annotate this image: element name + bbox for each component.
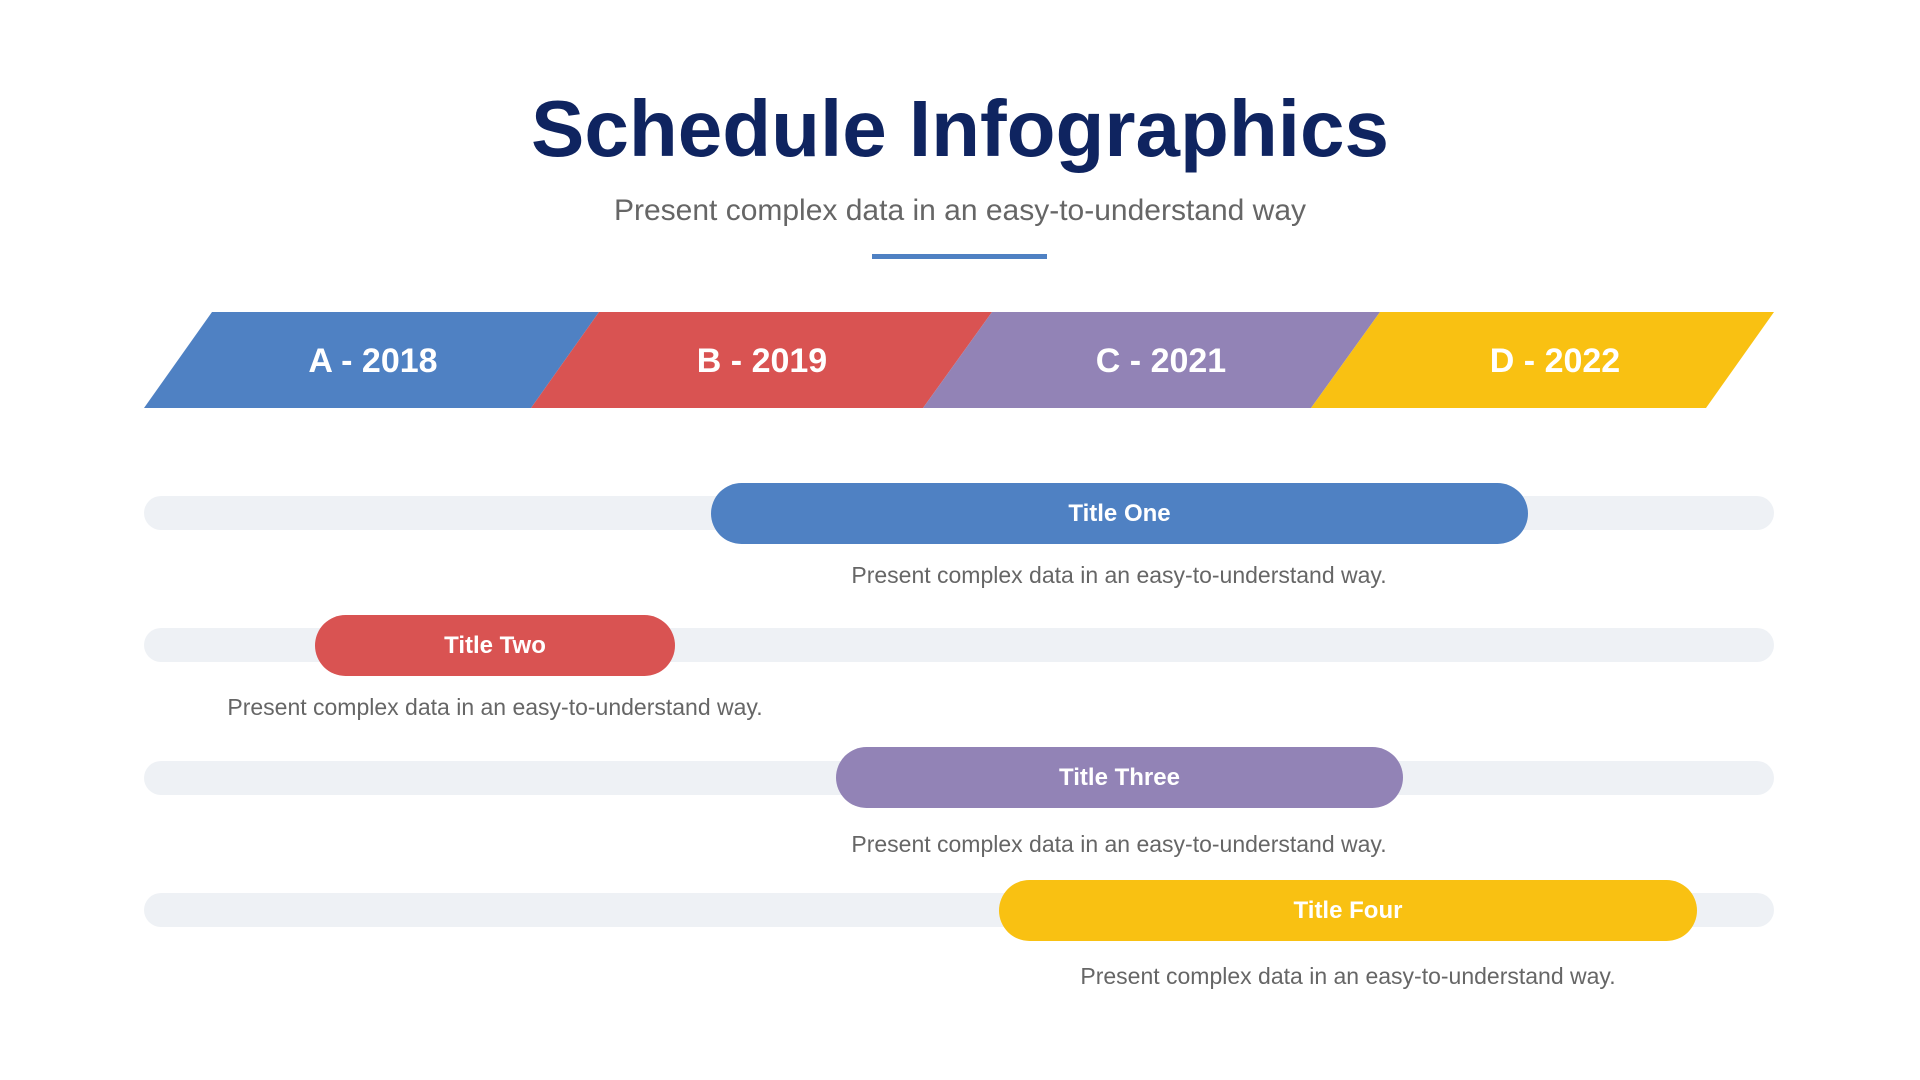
row 3 description: Present complex data in an easy-to-understand way. xyxy=(851,831,1387,857)
row 3 pill: Title Three xyxy=(1059,764,1180,790)
row 3 pill xyxy=(836,747,1403,808)
segment B: B - 2019 xyxy=(697,342,827,380)
row 2 track xyxy=(144,628,1774,662)
row 4 pill: Title Four xyxy=(1294,896,1402,924)
row 2 pill xyxy=(315,615,675,676)
segment A: A - 2018 xyxy=(308,342,438,380)
segment D xyxy=(1311,312,1774,408)
row 4 pill xyxy=(999,880,1697,941)
title: Schedule Infographics xyxy=(531,84,1389,173)
segment D: D - 2022 xyxy=(1490,342,1620,380)
underline xyxy=(872,254,1047,259)
row 2 pill: Title Two xyxy=(444,632,546,658)
row 2 description: Present complex data in an easy-to-understand way. xyxy=(227,694,763,720)
row 1 pill: Title One xyxy=(1068,500,1171,526)
row 3 track xyxy=(144,761,1774,795)
row 1 pill xyxy=(711,483,1528,544)
row 4 track xyxy=(144,893,1774,927)
segment C: C - 2021 xyxy=(1096,342,1226,380)
row 1 description: Present complex data in an easy-to-understand way. xyxy=(851,562,1387,588)
banner: years xyxy=(144,312,1774,408)
row 1 track xyxy=(144,496,1774,530)
segment C xyxy=(923,312,1380,408)
segment A xyxy=(144,312,599,408)
row 4 description: Present complex data in an easy-to-understand way. xyxy=(1080,963,1616,989)
subtitle: Present complex data in an easy-to-understand way xyxy=(614,194,1306,227)
segment B xyxy=(531,312,992,408)
